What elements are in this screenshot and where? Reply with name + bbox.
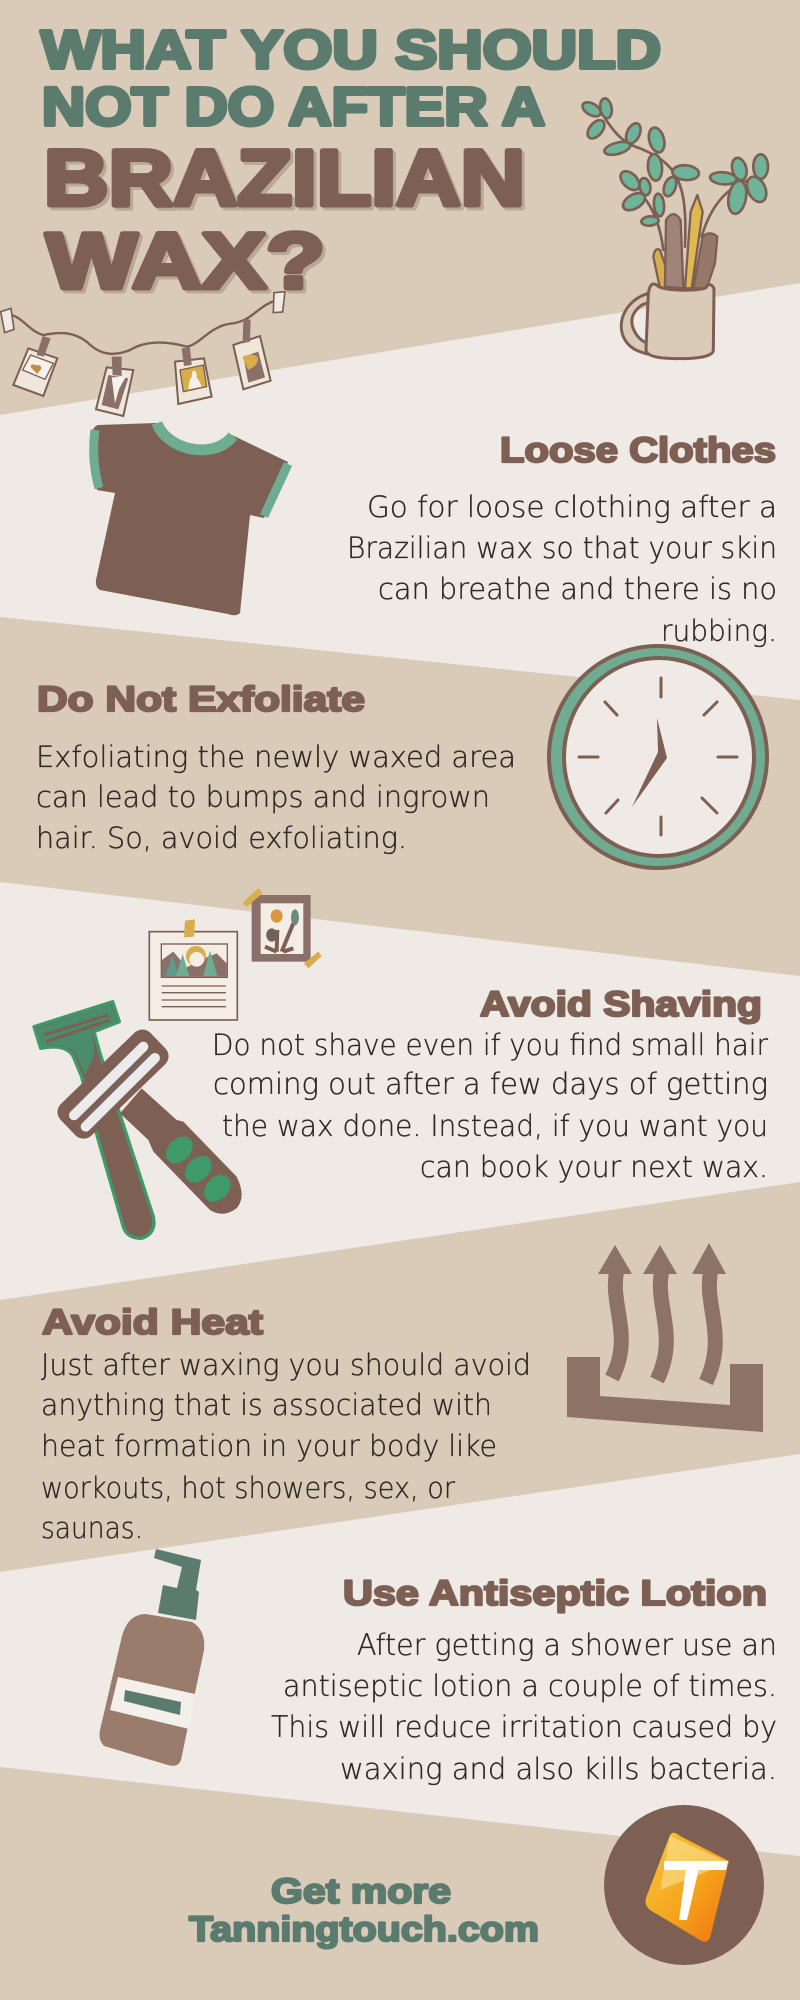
- blades: [74, 1047, 155, 1127]
- body text: heat formation in your body like: [41, 1429, 497, 1463]
- body text: Go for loose clothing after a: [367, 490, 777, 524]
- body text: Just after waxing you should avoid: [41, 1348, 531, 1382]
- heading: Avoid Heat: [42, 1303, 263, 1342]
- body text: [347, 490, 777, 648]
- body text: can lead to bumps and ingrown: [36, 780, 490, 814]
- footer call to action: [189, 1872, 539, 1949]
- body text: rubbing.: [661, 614, 777, 648]
- band: light band 2: [0, 882, 800, 1300]
- brown razor handle: [120, 1088, 242, 1214]
- clip right: [273, 292, 285, 313]
- body text: anything that is associated with: [41, 1388, 492, 1422]
- icon: razors: [34, 1002, 242, 1238]
- label: [110, 1677, 195, 1729]
- title line 4: WAX?: [46, 216, 325, 305]
- pens: [653, 195, 717, 288]
- icon: lotion bottle: [100, 1549, 204, 1766]
- band: light band 1: [0, 283, 800, 700]
- heading: Use Antiseptic Lotion: [343, 1574, 767, 1613]
- brown razor head: [53, 1025, 173, 1143]
- body text: [36, 740, 516, 855]
- photo 3: [175, 347, 212, 404]
- title line 4 shadow: WAX?: [49, 219, 328, 308]
- body text: Exfoliating the newly waxed area: [36, 740, 516, 774]
- website: Tanningtouch.com: [189, 1910, 539, 1949]
- body text: waxing and also kills bacteria.: [340, 1752, 777, 1786]
- string: [12, 300, 277, 354]
- pump: [154, 1549, 201, 1620]
- body text: can breathe and there is no: [378, 572, 777, 606]
- icon: plant and pens in mug: [580, 98, 770, 359]
- panel: use antiseptic lotion: [100, 1549, 777, 1786]
- body text: [271, 1628, 777, 1786]
- poster: [149, 919, 237, 1020]
- body text: Do not shave even if you find small hair: [212, 1028, 768, 1062]
- bottle body: [100, 1614, 204, 1766]
- panel: avoid shaving: [34, 888, 768, 1238]
- body text: Brazilian wax so that your skin: [347, 531, 777, 565]
- handle grips: [161, 1131, 236, 1207]
- heading: Loose Clothes: [500, 431, 776, 470]
- title line 3 shadow: BRAZILIAN: [47, 136, 528, 225]
- photo 1: [13, 336, 57, 396]
- heading: Avoid Shaving: [480, 985, 762, 1024]
- body text: saunas.: [41, 1511, 143, 1545]
- panel: loose clothes: [92, 423, 777, 648]
- band: light band 3: [0, 1454, 800, 1856]
- body text: coming out after a few days of getting: [213, 1067, 768, 1101]
- logo: Tanningtouch badge: [604, 1805, 764, 1965]
- body text: [212, 1028, 768, 1184]
- title line 2: NOT DO AFTER A: [42, 77, 545, 137]
- leaves: [580, 98, 770, 226]
- icon: wall pictures: [149, 888, 322, 1020]
- body text: After getting a shower use an: [357, 1628, 777, 1662]
- title line 3: BRAZILIAN: [44, 133, 525, 222]
- get more: Get more: [271, 1872, 451, 1911]
- body text: workouts, hot showers, sex, or: [41, 1471, 455, 1505]
- mug: [621, 284, 714, 359]
- photo 2: [96, 357, 133, 416]
- icon: photo garland: [1, 292, 285, 416]
- body text: hair. So, avoid exfoliating.: [36, 821, 407, 855]
- icon: t-shirt: [92, 423, 288, 615]
- clip left: [1, 308, 14, 333]
- body text: This will reduce irritation caused by: [271, 1710, 777, 1744]
- icon: heat rising: [567, 1243, 763, 1432]
- body text: antiseptic lotion a couple of times.: [283, 1669, 777, 1703]
- body text: the wax done. Instead, if you want you: [222, 1109, 768, 1143]
- photo 4: [233, 319, 271, 389]
- panel: do not exfoliate: [36, 646, 767, 868]
- body text: [41, 1348, 531, 1545]
- title: [41, 20, 661, 308]
- panel: avoid heat: [41, 1243, 763, 1545]
- title line 1: WHAT YOU SHOULD: [41, 20, 661, 80]
- branches: [605, 118, 763, 250]
- green razor: [34, 1002, 154, 1238]
- frame: [243, 888, 322, 968]
- body text: can book your next wax.: [420, 1150, 768, 1184]
- icon: clock: [549, 646, 767, 868]
- heading: Do Not Exfoliate: [37, 680, 365, 719]
